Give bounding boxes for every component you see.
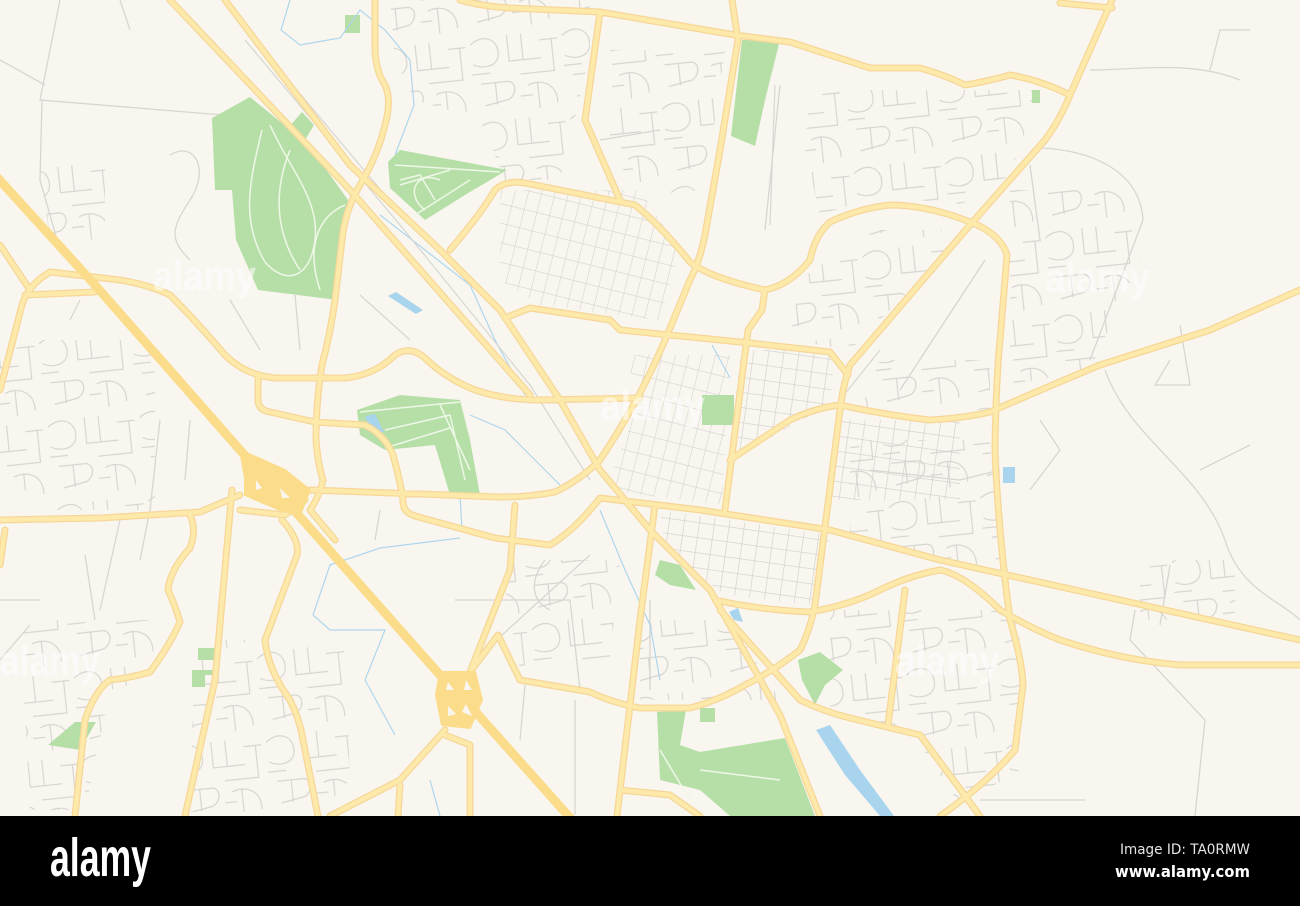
- watermark: alamy east: alamy: [1045, 254, 1151, 301]
- image id: Image ID: TA0RMW: [1120, 842, 1250, 858]
- footer bar: [0, 816, 1300, 906]
- park: southeast: [798, 652, 843, 705]
- railway lines: [245, 40, 880, 480]
- pond east: [1003, 467, 1015, 483]
- west interchange: [240, 450, 310, 515]
- watermark: alamy southeast: alamy: [895, 637, 1001, 684]
- park: southwest: [48, 722, 96, 750]
- river lake south: [816, 725, 894, 816]
- watermarks: [0, 252, 1151, 684]
- park: south large: [657, 710, 815, 816]
- south interchange: [436, 672, 482, 728]
- watermark: alamy southwest: alamy: [0, 637, 101, 684]
- park: downtown square: [702, 395, 734, 425]
- lake north: [388, 292, 423, 314]
- park: northwest golf course: [212, 97, 348, 300]
- pond downtown: [729, 608, 743, 622]
- watermark: alamy centre: alamy: [600, 382, 706, 429]
- park paths: [250, 125, 780, 800]
- streams: [281, 0, 730, 816]
- park: central golf course: [357, 395, 480, 495]
- park: central small: [655, 560, 696, 590]
- logo: alamy: alamy: [50, 828, 151, 888]
- website: www.alamy.com: [1115, 862, 1250, 881]
- lake in golf course: [365, 414, 384, 434]
- motorway: [0, 175, 572, 820]
- park: north golf course: [388, 150, 507, 220]
- park: north strip: [731, 40, 780, 146]
- park: small plots: [192, 15, 1040, 722]
- water bodies: [365, 292, 1015, 816]
- parks: [48, 15, 1040, 816]
- watermark: alamy west: alamy: [153, 252, 257, 299]
- interchange islands: [256, 480, 472, 716]
